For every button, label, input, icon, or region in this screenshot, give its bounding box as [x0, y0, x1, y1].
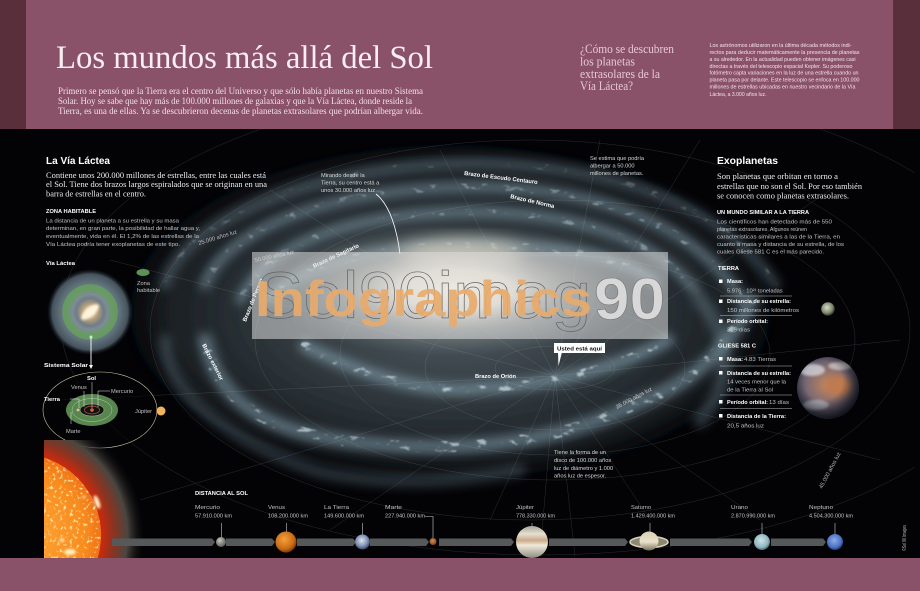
method text: millones de estrellas ubicadas en nuestro vecindario de la Vía	[710, 84, 856, 90]
distance labels: 50.000 años luz	[254, 250, 295, 264]
coordinate grid centred on the Sun	[60, 85, 915, 556]
Urano: 2.870.990.000 km	[731, 514, 775, 520]
solar system diagram: Venus	[71, 385, 87, 391]
La Tierra	[324, 505, 370, 550]
Mercurio: Mercurio	[195, 505, 220, 511]
arm names: Brazo de Orión	[475, 374, 516, 380]
question heading: los planetas	[580, 54, 635, 68]
method text: rectos para deducir matemáticamente la presencia de planetas	[710, 50, 860, 56]
list: Tierra	[718, 266, 799, 334]
bottom band	[0, 558, 920, 591]
distance labels: 45.000 años luz	[818, 452, 843, 490]
La Tierra: La Tierra	[324, 505, 350, 511]
Venus	[268, 505, 308, 552]
Urano	[731, 505, 775, 550]
list: Tierra: 365 días	[727, 328, 750, 334]
solar system diagram: Sol	[87, 376, 96, 382]
Venus: Venus	[268, 505, 285, 511]
list: Gliese 581 C	[718, 344, 792, 430]
note: disc shape: luz de diámetro y 1.000	[554, 466, 613, 472]
Mercurio	[195, 505, 232, 547]
list: Gliese 581 C: 4.83 Tierras	[744, 357, 776, 363]
Marte	[385, 505, 436, 545]
list: Gliese 581 C: de la Tierra al Sol	[727, 388, 773, 394]
arm names: Brazo exterior	[200, 343, 224, 382]
Júpiter	[516, 505, 555, 558]
list: Gliese 581 C: 14 veces menor que la	[727, 380, 787, 386]
question heading: extrasolares de la	[580, 67, 660, 81]
list: Gliese 581 C: GLIESE 581 C	[718, 344, 757, 350]
method text: Láctea, a 3.000 años luz.	[710, 92, 766, 98]
title: Los mundos más allá del Sol	[56, 40, 433, 76]
list: Gliese 581 C: 13 días	[769, 400, 789, 406]
La Tierra: 149.600.000 km	[324, 514, 364, 520]
legend: zona habitable	[136, 269, 160, 294]
Marte: Marte	[385, 505, 402, 511]
arm names: Brazo de Perseo	[242, 277, 265, 323]
watermark: 90	[594, 267, 665, 332]
galaxy labels	[198, 156, 843, 490]
habitable zone text: Vía Láctea podría tener exoplanetas de este tipo.	[46, 242, 180, 248]
list: Tierra: 150 millones de kilómetros	[727, 308, 799, 314]
distance labels	[198, 229, 843, 490]
callout: Usted está aquí	[554, 343, 605, 366]
arm names: Brazo de Escudo Centauro	[464, 171, 538, 186]
watermark: Sol90imag	[256, 258, 591, 332]
list: Tierra: TIERRA	[718, 266, 740, 272]
similar world text	[717, 220, 844, 256]
panel: zona habitable diagram	[43, 261, 166, 448]
habitable zone text: La distancia de un planeta a su estrella y su masa	[46, 218, 180, 224]
note: disc shape: años luz de espesor.	[554, 474, 607, 480]
note: disc shape: disco de 100.000 años	[554, 458, 611, 464]
similar world text: Los científicos han detectado más de 550	[717, 220, 832, 226]
arm names: Brazo de Norma	[510, 194, 555, 210]
note: disc shape	[554, 450, 613, 480]
list: Tierra: Distancia de su estrella:	[727, 299, 791, 305]
question heading: Vía Láctea?	[580, 79, 633, 93]
method text	[710, 43, 860, 98]
habitable zone text	[46, 218, 200, 248]
question heading	[580, 42, 675, 93]
list: Gliese 581 C: 20,5 años luz	[727, 424, 764, 430]
Júpiter: 778.330.000 km	[516, 514, 555, 520]
Saturno	[630, 505, 675, 550]
note: disc shape: Tiene la forma de un	[554, 450, 606, 456]
distance labels: 25.000 años luz	[198, 229, 238, 247]
Neptuno	[809, 505, 853, 550]
solar system diagram: Tierra	[44, 397, 61, 403]
list: Gliese 581 C: Distancia de su estrella:	[727, 371, 791, 377]
legend: zona habitable: Zona	[137, 281, 151, 287]
intro text	[58, 87, 424, 117]
list: Gliese 581 C: Masa:	[727, 357, 743, 363]
Saturno: Saturno	[631, 505, 651, 511]
list: Gliese 581 C: Distancia de la Tierra:	[727, 414, 786, 420]
description: Contiene unos 200.000 millones de estrellas, entre las cuales está	[46, 171, 266, 180]
background: black field	[0, 129, 920, 559]
Júpiter: Júpiter	[516, 505, 534, 511]
list: Gliese 581 C: Período orbital:	[727, 400, 768, 406]
heading: un mundo similar: UN MUNDO SIMILAR A LA TIERRA	[717, 210, 810, 216]
solar system diagram: Júpiter	[135, 409, 152, 415]
galactic core	[265, 224, 645, 356]
description: estrellas que no son el Sol. Por eso también	[717, 182, 863, 191]
panel: La Vía Láctea	[46, 155, 267, 248]
description: barra de estrellas en el centro.	[46, 190, 146, 198]
note: centre distance: Mirando desde la	[321, 173, 365, 179]
heading: distancia al Sol: DISTANCIA AL SOL	[195, 491, 248, 497]
description: se conocen como planetas extrasolares.	[717, 192, 849, 200]
similar world text: planetas extrasolares. Algunos reúnen	[717, 227, 807, 233]
planet: Tierra	[821, 302, 835, 316]
label: Vía Láctea: Vía Láctea	[46, 261, 76, 267]
legend: zona habitable: habitable	[137, 288, 160, 294]
header band	[0, 0, 920, 129]
method text: Los astrónomos utilizaron en la última década métodos indi-	[710, 43, 852, 49]
note: centre distance: unos 30.000 años luz	[321, 188, 375, 194]
solar system diagram: Mercurio	[111, 389, 133, 395]
question heading: ¿Cómo se descubren	[580, 42, 675, 56]
panel: Exoplanetas	[717, 155, 863, 430]
description: Son planetas que orbitan en torno a	[717, 172, 838, 181]
watermark: Infographics	[255, 271, 592, 327]
list: Tierra: Período orbital:	[727, 319, 768, 325]
list: Tierra: Masa:	[727, 279, 743, 285]
distance labels: 25.000 años luz	[615, 387, 654, 411]
similar world text: cuales Gliese 581 C es el más parecido.	[717, 250, 824, 256]
similar world text: cuanto a masa y distancia de su estrella, de los	[717, 242, 844, 248]
Venus: 108.200.000 km	[268, 514, 308, 520]
planet: Gliese 581 C	[797, 357, 859, 419]
habitable zone text: eventualmente, vida en él. El 1,2% de las estrellas de la	[46, 234, 200, 240]
description	[717, 172, 863, 200]
watermark	[252, 252, 668, 339]
note: centre distance: Tierra, su centro está a	[321, 180, 380, 186]
Urano: Urano	[731, 505, 748, 511]
credit: ©Sol 90 Images	[901, 525, 908, 551]
heading: La Vía Láctea: La Vía Láctea	[46, 155, 110, 167]
method text: a su alrededor. En la actualidad pueden obtener imágenes casi	[710, 57, 856, 63]
leader line to core	[376, 194, 400, 254]
description	[46, 171, 267, 198]
description: el Sol. Tiene dos brazos largos espiralados que se originan en una	[46, 180, 267, 189]
solar system diagram: Marte	[66, 429, 81, 435]
note: planet estimate	[590, 156, 645, 177]
similar world text: características similares a las de la Tierra, en	[717, 234, 840, 240]
note: planet estimate: millones de planetas.	[590, 171, 644, 177]
heading: zona habitable: ZONA HABITABLE	[46, 209, 96, 215]
note: planet estimate: albergar a 50.000	[590, 164, 635, 170]
intro text: Solar. Hoy se sabe que hay más de 100.000 millones de galaxias y que la Vía Láctea, donde reside la	[58, 97, 413, 107]
soft spiral arms	[165, 163, 775, 481]
star clumps along the arms	[165, 163, 775, 447]
Neptuno: 4.504.300.000 km	[809, 514, 853, 520]
habitable zone text: determinan, en gran parte, la posibilidad de hallar agua y,	[46, 226, 200, 232]
Marte: 227.940.000 km	[385, 514, 425, 520]
method text: directas a través del telescopio espacial Kepler. Su poderoso	[710, 64, 853, 70]
method text: planeta pasa por delante. Este telescopio se enfoca en 100.000	[710, 78, 860, 84]
sun image	[44, 440, 154, 558]
Neptuno: Neptuno	[809, 505, 833, 511]
chart: distancia al Sol	[112, 491, 853, 558]
solar system diagram	[43, 372, 166, 448]
note: planet estimate: Se estima que podría	[590, 156, 645, 162]
method text: fotómetro capta variaciones en la luz de una estrella cuando un	[710, 70, 859, 76]
distance track	[112, 538, 826, 546]
Mercurio: 57.910.000 km	[195, 514, 232, 520]
arrow: galaxy to solar system	[89, 336, 93, 369]
galaxy illustration	[115, 140, 785, 484]
arm names: Brazo de Sagitario	[312, 243, 361, 270]
Saturno: 1.429.400.000 km	[631, 514, 675, 520]
label: Sistema Solar: Sistema Solar	[44, 363, 89, 369]
intro text: Primero se pensó que la Tierra era el centro del Universo y que sólo había planetas en nuestro Sistema	[58, 87, 424, 97]
heading: Exoplanetas: Exoplanetas	[717, 155, 778, 167]
callout: Usted está aquí: Usted está aquí	[557, 346, 602, 352]
mini galaxy with habitable ring	[47, 269, 133, 355]
note: centre distance	[321, 173, 380, 194]
arm names	[200, 171, 555, 382]
intro text: Tierra, es una de ellas. Ya se descubrieron decenas de planetas extrasolares que podrían albergar vida.	[58, 107, 423, 117]
list: Tierra: 5.976 · 10²¹ toneladas	[727, 288, 783, 294]
